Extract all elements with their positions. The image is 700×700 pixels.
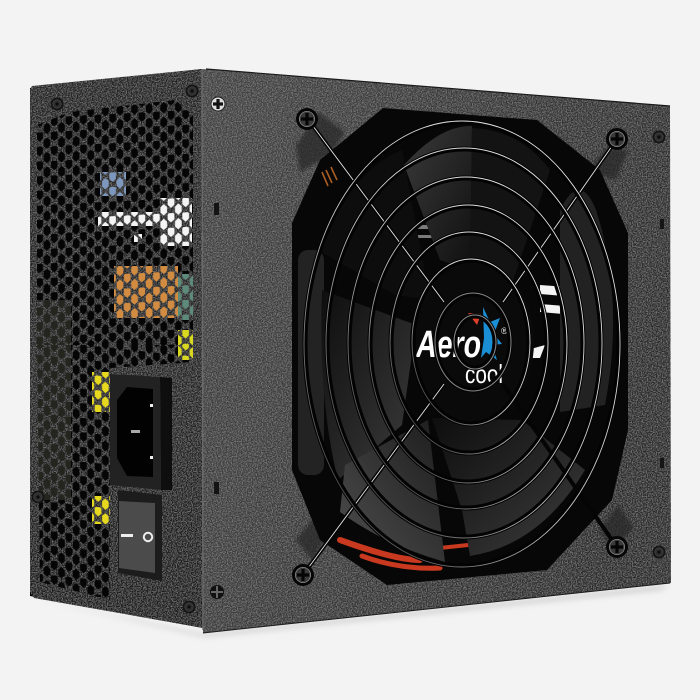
internals: yellow parts top bbox=[178, 330, 193, 360]
fan blade: top right bbox=[470, 128, 550, 290]
grill rings highlight bbox=[304, 121, 620, 567]
icon: side panel screws and slots bbox=[210, 97, 666, 599]
panel: rear face with internals showing through the vents bbox=[30, 69, 203, 628]
grill rings dark bbox=[305, 122, 619, 566]
icon: fan bracket shadows bbox=[296, 112, 634, 560]
internals: copper coil bbox=[114, 266, 178, 318]
power switch bbox=[118, 490, 162, 581]
internals: white stripes right of hub bbox=[532, 285, 560, 358]
icon: rear plate screws bbox=[32, 84, 198, 614]
fan blade: left bbox=[321, 290, 416, 480]
switch mark: off bbox=[144, 533, 152, 541]
logo: registered mark: ® bbox=[501, 326, 508, 336]
internals: circuit board stripes bbox=[418, 225, 432, 238]
fan blade: right bbox=[560, 190, 613, 412]
fan opening bbox=[285, 100, 635, 590]
internals: red wires bbox=[340, 540, 468, 568]
ground shadow bbox=[32, 585, 670, 637]
fan bbox=[285, 100, 635, 590]
logo: text: Aero bbox=[415, 324, 481, 366]
fan blade: bottom left bbox=[340, 420, 445, 562]
interior behind vents bbox=[30, 69, 203, 628]
switch mark: on bbox=[121, 534, 133, 537]
perforated rear plate bbox=[30, 69, 203, 628]
fan grill bbox=[303, 118, 620, 575]
fan blade: bottom bbox=[432, 418, 585, 556]
fan hub with logo bbox=[410, 260, 534, 424]
internals: yellow part by socket bbox=[92, 372, 112, 412]
fan blade: top left bbox=[370, 213, 418, 238]
logo: star bbox=[481, 307, 502, 360]
fan frame strut bbox=[298, 250, 324, 475]
icon: fan mounting screws bbox=[292, 108, 628, 586]
panel: fan face bbox=[202, 69, 671, 633]
internals: yellow part by switch bbox=[92, 496, 112, 524]
internals: orange coil bbox=[322, 167, 337, 186]
logo: red accent bbox=[468, 313, 481, 325]
logo: cool: cool bbox=[465, 359, 503, 389]
fan blade: top bbox=[404, 126, 472, 270]
internals: blue component bbox=[100, 172, 126, 196]
internals: grey left glow bbox=[37, 300, 71, 500]
internals: white board bbox=[98, 198, 192, 246]
product photo: power supply unit bbox=[30, 68, 671, 639]
power socket bbox=[110, 374, 172, 490]
internals: green capacitors bbox=[178, 274, 193, 320]
grill struts bbox=[303, 118, 617, 575]
